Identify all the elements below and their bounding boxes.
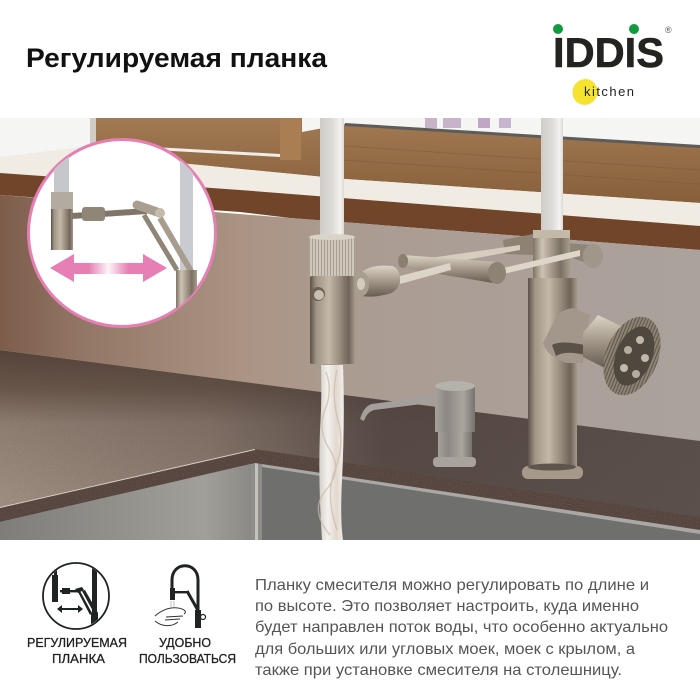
sink [0,463,700,540]
white sill [0,146,700,226]
right hose [541,118,563,233]
logo: IDDIS kitchen: kitchen [584,84,634,99]
sliding bar [355,230,603,297]
inset left hose [54,156,69,192]
description text: по высоте. Это позволяет настроить, куда именно [255,598,639,615]
description text: также при установке смесителя на столешницу. [255,662,622,679]
icon: easy to use [155,566,206,628]
inset circle with adjustable bar detail [28,120,216,326]
water stream [318,365,344,540]
wall [0,195,700,441]
inset bar [72,205,192,273]
description text: для больших или угловых моек, моек с крылом, а [255,641,635,658]
label: adjustable bar: ПЛАНКА [52,651,105,666]
icon: adjustable bar [43,563,109,633]
left hose [320,118,344,236]
window and wood frame [0,118,700,203]
inset base [176,270,197,309]
logo: IDDIS kitchen: ® [665,25,672,35]
kitchen photo scene [0,118,700,540]
countertop edge [0,445,700,535]
faucet body [522,278,583,479]
description text [255,577,668,679]
label: adjustable bar [27,635,127,666]
pull-out head [309,234,355,364]
wood band [0,173,700,250]
description text: будет направлен поток воды, что особенно актуально [255,619,668,636]
label: adjustable bar: РЕГУЛИРУЕМАЯ [27,635,127,650]
soap dispenser [360,381,476,467]
title: Регулируемая планка [26,43,328,73]
inset head [51,192,73,250]
logo: IDDIS kitchen: IDDIS [553,29,664,76]
handle with knurled wheel [543,308,661,396]
double arrow [50,254,167,282]
inset right hose [180,160,193,272]
logo: IDDIS kitchen [553,24,672,108]
description text: Планку смесителя можно регулировать по длине и [255,577,649,594]
label: easy to use: УДОБНО [159,635,211,650]
label: easy to use [139,635,236,666]
countertop [0,350,700,530]
label: easy to use: ПОЛЬЗОВАТЬСЯ [139,651,236,666]
